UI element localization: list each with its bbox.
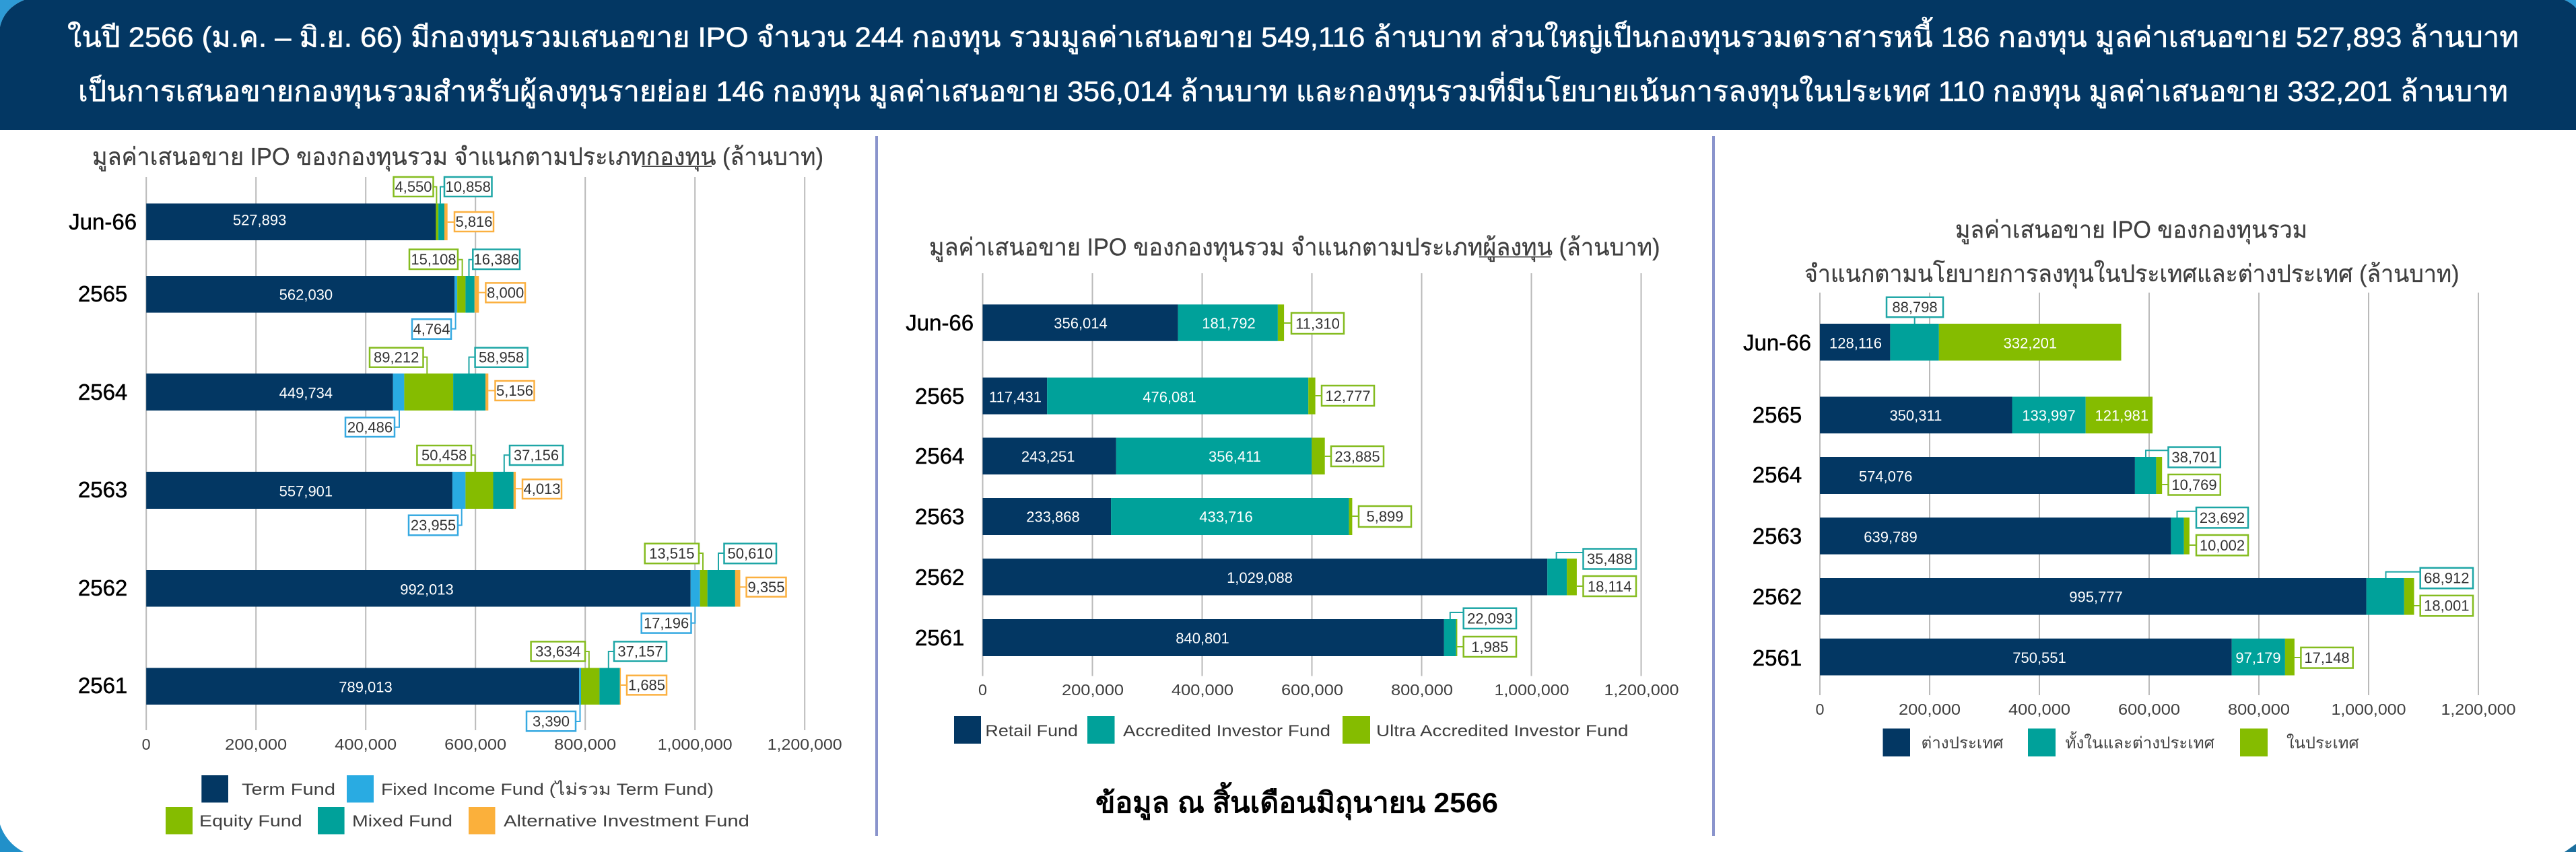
callout: 11,310 [1284, 313, 1344, 334]
chart 3 row: 2565: 121,981 [2095, 407, 2148, 424]
chart 2 axis labels: 400,000 [1172, 681, 1233, 699]
chart 2 row: 2565: 117,431 [989, 389, 1042, 405]
chart 3 axis labels: 600,000 [2118, 701, 2180, 718]
chart 3 axis labels: 400,000 [2008, 701, 2070, 718]
chart 3 row: 2562: 2562 [1753, 584, 1802, 609]
callout: 17,148 [2295, 647, 2353, 668]
chart 2 row: Jun-66 [906, 304, 1344, 341]
callout: 10,769 [2162, 474, 2221, 495]
chart 2 axis labels: 0 [978, 681, 987, 699]
callout: 1,685: 1,685 [628, 677, 665, 693]
callout: 38,701: 38,701 [2171, 449, 2217, 466]
callout: 18,114: 18,114 [1588, 578, 1632, 595]
callout: 23,885 [1325, 446, 1384, 466]
callout: 12,777: 12,777 [1325, 388, 1371, 404]
chart 3 axis labels: 0 [1815, 701, 1825, 718]
chart 1 legend: Term Fund [242, 781, 335, 799]
chart 1 title: มูลค่าเสนอขาย IPO ของกองทุนรวม จำแนกตามประเภทกองทุน (ล้านบาท) [92, 143, 823, 172]
callout: 33,634: 33,634 [535, 643, 580, 660]
callout: 17,148: 17,148 [2304, 649, 2350, 666]
callout: 15,108 [409, 250, 463, 276]
chart 2 row: 2561: 2561 [915, 625, 964, 650]
corner: bottom right [2565, 844, 2576, 852]
callout: 5,156 [488, 381, 535, 400]
callout: 10,769: 10,769 [2171, 476, 2217, 493]
chart 1 axis labels: 200,000 [225, 736, 287, 753]
chart 1 axis labels: 600,000 [444, 736, 506, 753]
callout: 37,157: 37,157 [617, 643, 663, 660]
chart 2 grid lines [983, 273, 1641, 676]
callout: 5,899: 5,899 [1366, 508, 1404, 525]
callout: 88,798 [1887, 297, 1943, 324]
chart 3 title: จำแนกตามนโยบายการลงทุนในประเทศและต่างประเทศ (ล้านบาท) [1804, 260, 2459, 289]
chart 2 row: 2564: 356,411 [1209, 448, 1261, 465]
chart 2 row: 2564 [915, 437, 1384, 474]
callout: 23,692: 23,692 [2200, 509, 2245, 526]
chart 1 row: 2564 [78, 348, 535, 437]
chart 3 row: 2561: 2561 [1753, 645, 1802, 670]
header line 2: เป็นการเสนอขายกองทุนรวมสำหรับผู้ลงทุนรายย่อย 146 กองทุน มูลค่าเสนอขาย 356,014 ล้านบาท และกองทุนรวมที่มีนโยบายเน้นการลงทุนในประเทศ 110 กองทุน มูลค่าเสนอขาย 332,201 ล้านบาท [78, 72, 2508, 109]
callout: 16,386 [469, 250, 520, 276]
chart 2 row: 2562: 2562 [915, 565, 964, 590]
chart 1 axis labels: 1,000,000 [658, 736, 733, 753]
callout: 23,955 [409, 509, 462, 535]
callout: 23,692 [2177, 507, 2248, 528]
chart 3 row: 2562: 995,777 [2069, 589, 2123, 606]
callout: 33,634 [531, 641, 589, 668]
callout: 5,816: 5,816 [455, 213, 493, 230]
chart 2 axis labels: 1,000,000 [1495, 681, 1569, 699]
chart 1 row: 2561 [78, 641, 667, 731]
chart 2 row: 2565 [915, 378, 1374, 415]
chart 3 row: 2562 [1753, 568, 2473, 616]
callout: 50,610: 50,610 [728, 545, 773, 562]
chart 2 row: 2564: 2564 [915, 443, 964, 468]
chart 1 row: Jun-66: Jun-66 [69, 209, 137, 234]
corner: top left [0, 0, 24, 27]
chart 1 axis labels: 0 [142, 736, 151, 753]
callout: 13,515: 13,515 [649, 545, 694, 562]
callout: 17,196: 17,196 [644, 615, 689, 631]
callout: 35,488 [1557, 549, 1636, 569]
chart 2 axis labels: 800,000 [1391, 681, 1453, 699]
callout: 10,858 [440, 177, 492, 203]
panel: IPO value by investor type [906, 233, 1679, 820]
chart 1 row: 2562: 992,013 [400, 581, 454, 598]
chart 3 row: 2564 [1753, 447, 2221, 495]
chart 1 row: 2561: 789,013 [339, 678, 393, 695]
chart 3 title [1804, 216, 2459, 289]
chart 1 row: 2564: 449,734 [279, 385, 333, 402]
panel: IPO value by fund type [69, 143, 842, 835]
callout: 11,310: 11,310 [1295, 315, 1340, 332]
chart 2 row: Jun-66: Jun-66 [906, 310, 974, 335]
callout: 4,013: 4,013 [523, 481, 561, 497]
chart 1 axis labels: 400,000 [335, 736, 397, 753]
callout: 50,458 [417, 446, 475, 472]
callout: 38,701 [2146, 447, 2221, 467]
chart 1 row: 2563: 2563 [78, 477, 127, 502]
callout: 37,157 [609, 641, 667, 668]
chart 3 axis labels: 200,000 [1899, 701, 1961, 718]
chart 3 legend [1883, 728, 2359, 756]
chart 3 axis labels [1815, 701, 2515, 718]
chart 2 legend: Accredited Investor Fund [1123, 722, 1330, 740]
callout: 10,002 [2190, 535, 2248, 555]
chart 2 row: 2565: 2565 [915, 384, 964, 409]
chart 3 row: 2565: 2565 [1753, 402, 1802, 427]
chart 1 row: 2561: 2561 [78, 673, 127, 698]
chart 1 row: 2565 [78, 250, 525, 339]
chart 2 row: 2562 [915, 549, 1636, 596]
callout: 37,156: 37,156 [514, 447, 559, 464]
chart 2 axis labels: 200,000 [1062, 681, 1124, 699]
corner: top right [2565, 0, 2576, 8]
chart 2 row: 2563: 233,868 [1026, 509, 1080, 526]
callout: 8,000: 8,000 [487, 284, 524, 301]
panel: IPO value by domestic and foreign investment policy [1743, 216, 2515, 756]
callout: 18,001: 18,001 [2424, 598, 2469, 614]
callout: 9,355: 9,355 [747, 579, 785, 596]
callout: 3,390 [527, 705, 580, 731]
callout: 22,093 [1450, 608, 1516, 629]
chart 3 row: 2565: 133,997 [2022, 407, 2076, 424]
callout: 20,486: 20,486 [347, 419, 393, 436]
callout: 50,610 [718, 544, 776, 570]
callout: 89,212: 89,212 [374, 349, 419, 366]
callout: 15,108: 15,108 [411, 251, 456, 268]
chart 2 axis labels: 600,000 [1281, 681, 1343, 699]
callout: 20,486 [345, 411, 399, 437]
chart 3 row: 2564: 574,076 [1859, 468, 1912, 485]
callout: 12,777 [1316, 386, 1374, 406]
chart 1 row: 2564: 2564 [78, 380, 127, 404]
chart 1 legend: Alternative Investment Fund [504, 812, 749, 830]
chart 1 row: 2563 [78, 446, 563, 535]
chart 3 row: 2561: 97,179 [2235, 649, 2281, 666]
chart 1 row: Jun-66 [69, 177, 494, 240]
chart 3 grid lines [1820, 293, 2478, 695]
chart 1 row: Jun-66: 527,893 [233, 211, 286, 229]
divider left [875, 136, 878, 836]
header banner [0, 0, 2576, 130]
chart 2 row: 2565: 476,081 [1143, 389, 1196, 405]
callout: 58,958: 58,958 [479, 349, 524, 366]
chart 2 row: 2563: 433,716 [1199, 509, 1253, 526]
callout: 23,955: 23,955 [411, 517, 456, 534]
chart 1 axis labels [142, 736, 842, 753]
chart 2 legend: Retail Fund [985, 722, 1078, 740]
chart 3 title: มูลค่าเสนอขาย IPO ของกองทุนรวม [1955, 216, 2307, 245]
callout: 10,002: 10,002 [2200, 537, 2245, 554]
chart 1 row: 2563: 557,901 [279, 483, 333, 499]
callout: 22,093: 22,093 [1467, 610, 1512, 627]
chart 3 row: 2563 [1753, 507, 2248, 555]
chart 1 legend [166, 775, 749, 835]
callout: 88,798: 88,798 [1892, 299, 1938, 316]
chart 3 row: 2561: 750,551 [2012, 649, 2066, 666]
chart 2 row: 2561 [915, 608, 1516, 657]
chart 3 row: Jun-66: 128,116 [1829, 335, 1882, 351]
callout: 37,156 [504, 446, 563, 472]
chart 1 legend: Equity Fund [199, 812, 302, 830]
callout: 89,212 [370, 348, 427, 374]
chart 1 grid lines [146, 177, 805, 730]
callout: 10,858: 10,858 [446, 178, 491, 195]
callout: 68,912 [2386, 568, 2473, 588]
chart 2 title: มูลค่าเสนอขาย IPO ของกองทุนรวม จำแนกตามประเภทผู้ลงทุน (ล้านบาท) [929, 233, 1660, 262]
chart 2 row: 2561: 840,801 [1176, 630, 1229, 647]
chart 1 legend: Fixed Income Fund (ไม่รวม Term Fund) [381, 780, 714, 799]
chart 3 legend: ทั้งในและต่างประเทศ [2066, 731, 2214, 752]
chart 3 row: 2565 [1753, 397, 2153, 433]
callout: 18,001 [2414, 596, 2473, 616]
chart 2 axis labels [978, 681, 1679, 699]
callout: 23,885: 23,885 [1334, 448, 1380, 465]
corner: bottom left [0, 824, 24, 852]
chart 3 row: Jun-66: 332,201 [2004, 335, 2057, 351]
callout: 5,156: 5,156 [496, 382, 533, 399]
callout: 1,985 [1457, 637, 1516, 657]
callout: 4,764: 4,764 [413, 320, 450, 338]
chart 3 row: 2563: 2563 [1753, 524, 1802, 548]
chart 2 row: 2563: 2563 [915, 504, 964, 529]
chart 2 row: 2563 [915, 498, 1411, 535]
chart 3 row: 2563: 639,789 [1864, 528, 1918, 545]
divider right [1712, 136, 1715, 836]
callout: 4,550: 4,550 [395, 178, 432, 195]
callout: 3,390: 3,390 [533, 713, 570, 730]
chart 2 row: Jun-66: 356,014 [1054, 315, 1108, 332]
callout: 5,816 [448, 212, 494, 232]
chart 1 legend: Mixed Fund [352, 812, 452, 830]
chart 3 row: 2561 [1753, 639, 2353, 676]
callout: 18,114 [1577, 576, 1636, 596]
chart 3 row: Jun-66: Jun-66 [1743, 330, 1811, 355]
callout: 50,458: 50,458 [421, 447, 467, 464]
chart 3 axis labels: 800,000 [2228, 701, 2290, 718]
chart 2 legend [954, 716, 1628, 744]
chart 1 row: 2562: 2562 [78, 575, 127, 600]
chart 2 row: 2564: 243,251 [1021, 448, 1075, 465]
callout: 1,985: 1,985 [1471, 639, 1508, 655]
callout: 68,912: 68,912 [2424, 569, 2469, 587]
chart 2 legend: Ultra Accredited Investor Fund [1376, 722, 1628, 740]
chart 2 row: 2562: 1,029,088 [1227, 569, 1293, 586]
callout: 16,386: 16,386 [474, 251, 519, 268]
chart 2 axis labels: 1,200,000 [1604, 681, 1679, 699]
chart 3 legend: ในประเทศ [2286, 734, 2359, 752]
callout: 8,000 [479, 283, 525, 302]
callout: 13,515 [645, 544, 703, 570]
callout: 17,196 [642, 607, 695, 633]
data date note: ข้อมูล ณ สิ้นเดือนมิถุนายน 2566 [1095, 781, 1498, 820]
header line 1: ในปี 2566 (ม.ค. – มิ.ย. 66) มีกองทุนรวมเสนอขาย IPO จำนวน 244 กองทุน รวมมูลค่าเสนอขาย 549,116 ล้านบาท ส่วนใหญ่เป็นกองทุนรวมตราสารหนี้ 186 กองทุน มูลค่าเสนอขาย 527,893 ล้านบาท [67, 16, 2519, 55]
callout: 58,958 [469, 348, 528, 374]
chart 3 axis labels: 1,000,000 [2331, 701, 2406, 718]
callout: 4,764 [412, 313, 456, 339]
chart 1 row: 2562 [78, 544, 786, 633]
chart 3 row: Jun-66 [1743, 297, 2121, 361]
callout: 4,550 [394, 177, 436, 203]
chart 1 axis labels: 800,000 [554, 736, 616, 753]
chart 1 row: 2565: 2565 [78, 281, 127, 306]
chart 2 row: Jun-66: 181,792 [1202, 315, 1256, 332]
chart 3 axis labels: 1,200,000 [2441, 701, 2515, 718]
chart 1 row: 2565: 562,030 [279, 287, 333, 303]
chart 1 axis labels: 1,200,000 [768, 736, 842, 753]
chart 3 legend: ต่างประเทศ [1922, 734, 2004, 752]
chart 3 row: 2565: 350,311 [1889, 407, 1942, 424]
callout: 35,488: 35,488 [1587, 551, 1632, 567]
callout: 5,899 [1352, 506, 1411, 527]
chart 3 row: 2564: 2564 [1753, 462, 1802, 487]
